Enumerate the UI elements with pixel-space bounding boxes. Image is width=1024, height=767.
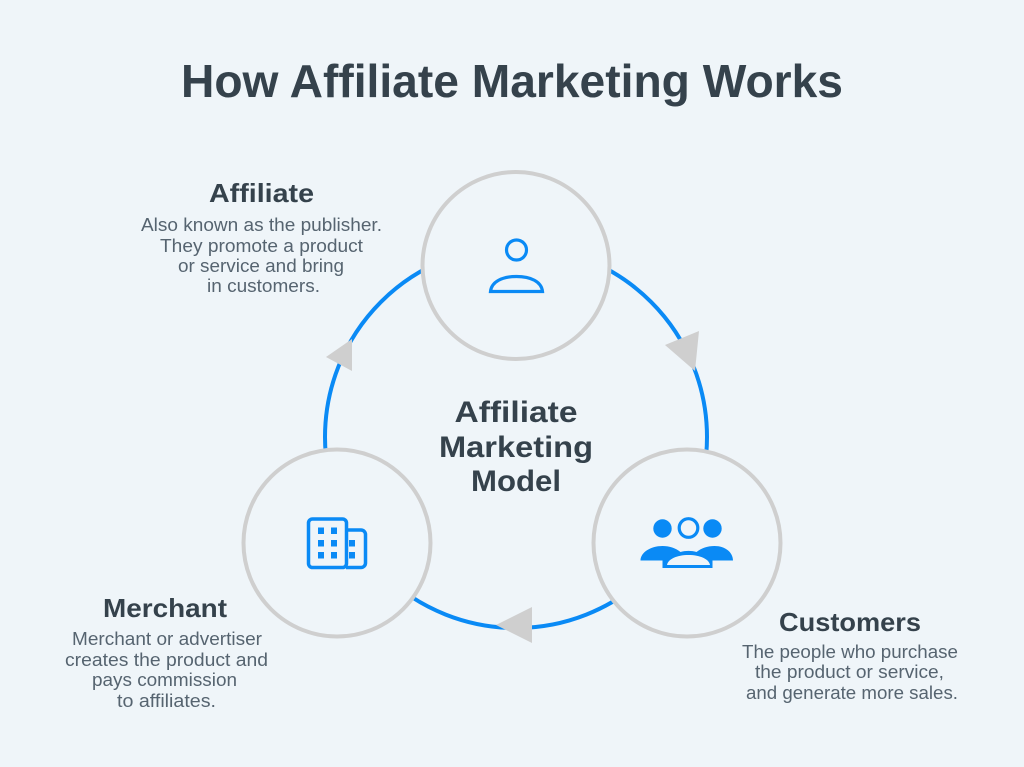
center label bbox=[439, 396, 593, 498]
icon: group of people bbox=[640, 519, 733, 568]
cycle ring bbox=[325, 246, 707, 628]
text block: affiliate: Also known as the publisher. bbox=[141, 215, 382, 235]
title: How Affiliate Marketing Works bbox=[181, 55, 843, 107]
text block: merchant: Merchant or advertiser bbox=[72, 629, 262, 649]
text block: merchant: Merchant bbox=[103, 593, 227, 623]
node: merchant bbox=[244, 450, 430, 636]
node: affiliate bbox=[422, 172, 610, 359]
center label: Marketing bbox=[439, 431, 593, 464]
icon: person bbox=[490, 240, 542, 292]
text block: affiliate: They promote a product bbox=[160, 236, 363, 256]
arrow: affiliate to customers bbox=[665, 331, 699, 371]
text block: merchant: to affiliates. bbox=[117, 691, 216, 711]
center label: Model bbox=[471, 465, 561, 498]
text block: customers bbox=[742, 607, 958, 703]
text block: customers: The people who purchase bbox=[742, 642, 958, 662]
text block: customers: Customers bbox=[779, 607, 921, 637]
icon: buildings bbox=[308, 519, 366, 568]
text block: affiliate: in customers. bbox=[207, 276, 320, 296]
text block: affiliate: or service and bring bbox=[178, 256, 344, 276]
node: customers bbox=[594, 450, 780, 636]
text block: merchant bbox=[65, 593, 268, 711]
text block: affiliate bbox=[141, 178, 382, 296]
text block: merchant: pays commission bbox=[92, 670, 237, 690]
text block: merchant: creates the product and bbox=[65, 650, 268, 670]
arrow: merchant to affiliate bbox=[326, 339, 352, 371]
center label: Affiliate bbox=[454, 396, 578, 429]
text block: affiliate: Affiliate bbox=[209, 178, 314, 208]
arrow: customers to merchant bbox=[496, 607, 532, 643]
text block: customers: and generate more sales. bbox=[746, 683, 958, 703]
text block: customers: the product or service, bbox=[755, 662, 944, 682]
